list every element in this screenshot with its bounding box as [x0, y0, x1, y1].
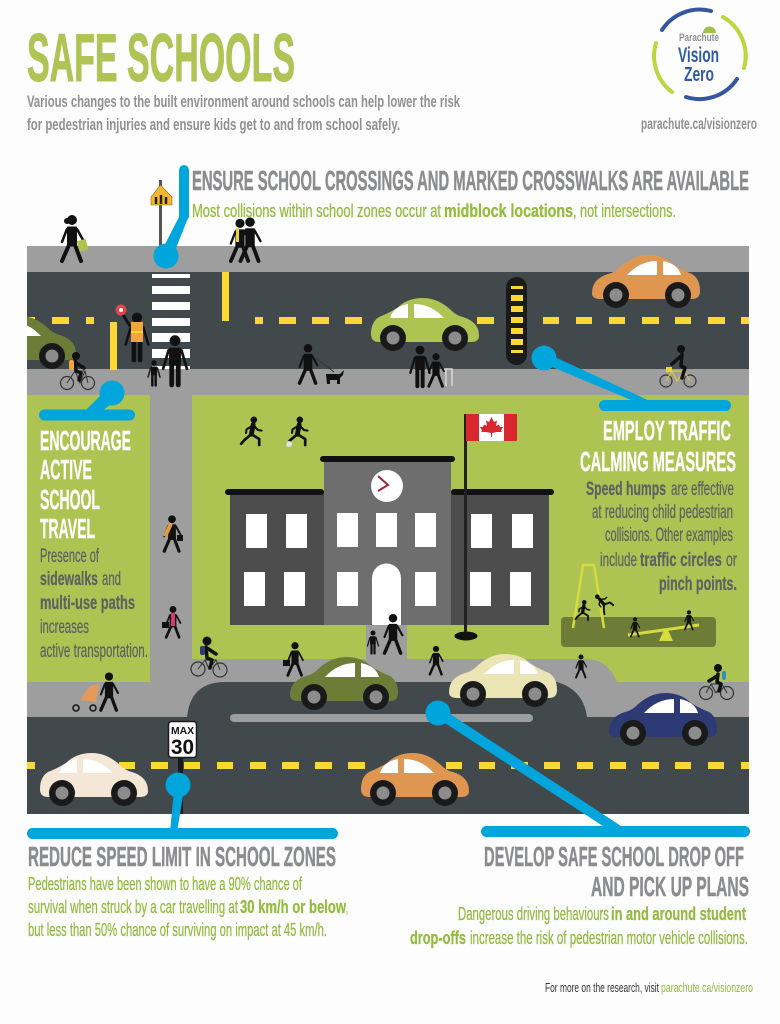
panel text: encourage active school travel: SCHOOL [40, 484, 100, 515]
crossing guard [116, 304, 148, 360]
walkers on side path [162, 515, 183, 637]
panel text: develop safe drop off plans: drop-offs [410, 928, 466, 948]
panel text: employ traffic calming [580, 415, 737, 595]
car: olive upper left (clipped) [27, 316, 76, 369]
panel text: employ traffic calming: Speed humps [586, 479, 666, 500]
panel text: encourage active school travel: and [102, 569, 121, 590]
windows [244, 513, 533, 606]
panel text: reduce speed limit: Pedestrians have been shown to have a 90% chance of [28, 874, 303, 894]
text: SAFE SCHOOLS [27, 20, 295, 96]
driveway median [230, 714, 533, 722]
panel text: encourage active school travel: increases [40, 617, 89, 638]
street map [0, 180, 749, 814]
lawn: school grounds [192, 395, 749, 682]
child cyclist left [60, 352, 94, 390]
callout line: speed limit [27, 772, 338, 839]
panel text: employ traffic calming: or [726, 550, 737, 571]
panel text: reduce speed limit: survival when struck by a car travelling at [28, 897, 238, 917]
flag and pole [454, 414, 517, 640]
adult and child [148, 335, 187, 385]
intro text: Various changes to the built environment around schools can help lower the risk [27, 92, 460, 111]
max 30 speed sign [168, 722, 196, 814]
panel text: encourage active school travel: active transportation. [40, 641, 148, 662]
walker with briefcase [283, 642, 303, 675]
car: cream driveway [449, 654, 557, 707]
intro text: for pedestrian injuries and ensure kids get to and from school safely. [27, 115, 400, 134]
car: green upper [371, 298, 479, 351]
elder with helper [410, 346, 452, 386]
playground [561, 565, 716, 647]
swinging children [575, 600, 590, 620]
car: navy lower [609, 693, 717, 746]
crossings body text: midblock locations [444, 201, 573, 221]
girl with bag [430, 646, 443, 674]
car: beige lower [40, 753, 148, 806]
lawn: left block [27, 395, 150, 682]
heading: crossings [192, 165, 749, 221]
callout line: traffic calming [532, 346, 731, 411]
cyclist right upper [660, 345, 696, 387]
woman walking dog [300, 344, 344, 384]
lower road dashes [27, 762, 749, 769]
panel text: reduce speed limit: 30 km/h or below [240, 897, 347, 917]
max 30 speed sign: MAX [171, 726, 194, 737]
centre block [324, 461, 451, 625]
logo: Parachute Vision Zero: Zero [684, 64, 714, 86]
panel text: employ traffic calming: traffic circles [640, 550, 722, 571]
child walking [576, 654, 586, 678]
text: , [346, 897, 348, 917]
pedestrians: pair top [231, 217, 260, 261]
panel text: encourage active school travel: multi-use paths [40, 593, 135, 614]
school building [225, 456, 554, 659]
footer note: For more on the research, visit [545, 980, 659, 995]
panel text: encourage active school travel: Presence of [40, 546, 99, 567]
crosswalk [152, 274, 190, 369]
school crossing sign [151, 180, 172, 246]
upper road dashes [27, 272, 749, 370]
panel text: encourage active school travel: TRAVEL [40, 513, 95, 544]
crossings body text: , not intersections. [573, 201, 676, 221]
door [372, 564, 401, 625]
intro text [27, 92, 460, 134]
seesaw children [631, 617, 640, 637]
panel text: encourage active school travel: ACTIVE [40, 454, 92, 485]
car: orange upper [592, 255, 700, 308]
mother and child at door [368, 614, 402, 654]
pedestrian: woman top left [62, 215, 88, 261]
panel text: reduce speed limit [28, 841, 348, 940]
car: orange lower [361, 753, 469, 806]
roofs [225, 489, 324, 495]
cyclist right lower [700, 664, 734, 700]
lower road [27, 717, 749, 814]
driveway [187, 682, 587, 718]
panel text: employ traffic calming: include [600, 550, 637, 571]
clock [371, 470, 403, 502]
logo: Parachute Vision Zero [654, 10, 746, 99]
panel text: reduce speed limit: but less than 50% chance of surviving on impact at 45 km/h. [28, 920, 327, 940]
panel text: encourage active school travel: ENCOURAGE [40, 425, 131, 456]
crossings body text: Most collisions within school zones occur at [192, 201, 441, 221]
panel text: employ traffic calming: pinch points. [659, 574, 737, 595]
runners on lawn [241, 416, 308, 447]
panel text: encourage active school travel [40, 425, 148, 662]
callout line: crossings [154, 165, 189, 268]
swing set [573, 565, 604, 628]
child cyclist driveway [191, 636, 227, 677]
logo: Parachute Vision Zero: Vision [678, 44, 719, 67]
callout line: active travel [39, 380, 135, 420]
panel text: employ traffic calming: are effective [671, 479, 734, 500]
max 30 speed sign: 30 [171, 736, 194, 759]
door path [366, 625, 407, 659]
speed hump [506, 277, 527, 365]
sidewalks base [27, 246, 749, 814]
callout line: drop off [426, 700, 750, 837]
panel text: encourage active school travel: sidewalks [40, 569, 98, 590]
panel text: reduce speed limit: REDUCE SPEED LIMIT IN SCHOOL ZONES [28, 841, 336, 872]
seesaw [628, 625, 699, 635]
car: olive driveway [290, 657, 398, 710]
logo: Parachute Vision Zero: Parachute [679, 32, 719, 44]
upper road [27, 272, 749, 369]
wings [230, 491, 549, 625]
panel text: develop safe drop off plans [410, 841, 749, 948]
woman with stroller [73, 672, 118, 711]
panel text: develop safe drop off plans: Dangerous driving behaviours [458, 904, 609, 924]
